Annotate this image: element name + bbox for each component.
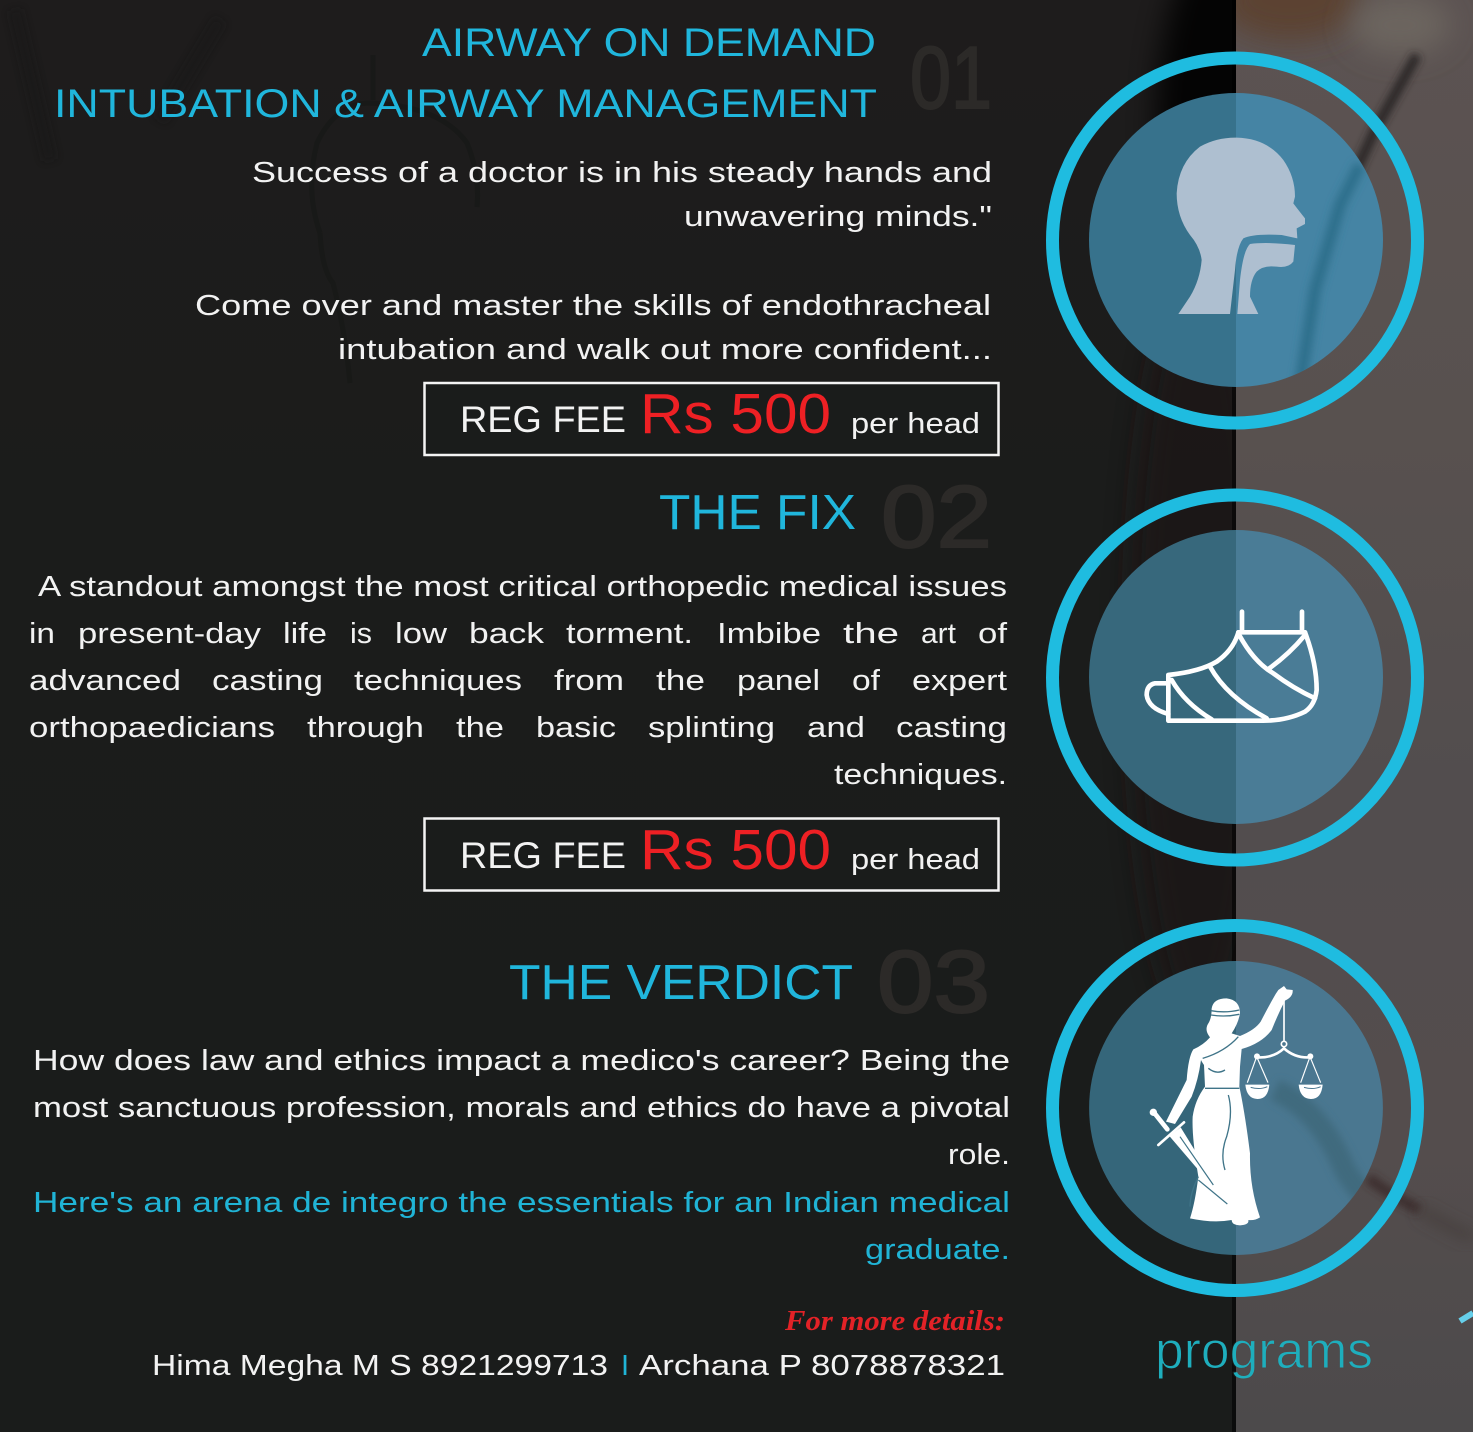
background: dark left panel xyxy=(1150,0,1236,1432)
the fix body text: from xyxy=(554,665,624,697)
the fix body text: expert xyxy=(912,665,1007,697)
the fix body text: advanced xyxy=(29,665,181,697)
the fix body text: the xyxy=(656,665,705,697)
the fix body text: and xyxy=(807,712,865,744)
the fix body text: of xyxy=(852,665,881,697)
intro text block: intubation and walk out more confident... xyxy=(338,334,992,366)
the fix body text: life xyxy=(283,618,327,650)
the fix body text: art xyxy=(921,618,956,650)
the verdict body text xyxy=(33,1045,1010,1266)
the verdict body text: Here's an arena de integro the essentials for an Indian medical xyxy=(33,1187,1010,1219)
contact line xyxy=(152,1350,1005,1382)
the fix body text: Imbibe xyxy=(717,618,821,650)
the fix body text: panel xyxy=(737,665,820,697)
fee box 1 xyxy=(424,382,998,455)
icon circle 3: lady justice xyxy=(1052,926,1418,1290)
title: airway on demand: INTUBATION & AIRWAY MANAGEMENT xyxy=(54,82,877,126)
contact line: Hima Megha M S 8921299713 xyxy=(152,1350,608,1382)
the fix body text: low xyxy=(395,618,448,650)
heading: the fix: THE FIX xyxy=(659,486,856,540)
icon: foot in cast xyxy=(1147,612,1317,721)
title: airway on demand xyxy=(54,21,877,126)
icon circle 1: airway head xyxy=(1052,58,1418,423)
the fix body text: of xyxy=(978,618,1008,650)
intro text block: Come over and master the skills of endothracheal xyxy=(195,290,991,322)
the fix body text: in xyxy=(29,618,55,650)
the fix body text: through xyxy=(307,712,424,744)
number 01: 01 xyxy=(910,28,992,127)
the verdict body text: How does law and ethics impact a medico's career? Being the xyxy=(33,1045,1010,1077)
the fix body text xyxy=(29,571,1008,791)
the verdict body text: role. xyxy=(948,1139,1010,1171)
title: airway on demand: AIRWAY ON DEMAND xyxy=(422,21,876,65)
fee box 2: REG FEE xyxy=(460,835,626,876)
intro text block: Success of a doctor is in his steady hands and xyxy=(252,157,992,189)
heading: the verdict: THE VERDICT xyxy=(509,956,853,1010)
fee box 1: per head xyxy=(851,408,980,440)
for more details: For more details: xyxy=(784,1305,1005,1337)
fee box 2: per head xyxy=(851,844,980,876)
fee box 1: REG FEE xyxy=(460,399,626,440)
the fix body text: orthopaedicians xyxy=(29,712,275,744)
the fix body text: is xyxy=(350,618,372,650)
the verdict body text: most sanctuous profession, morals and ethics do have a pivotal xyxy=(33,1092,1010,1124)
the fix body text: basic xyxy=(536,712,616,744)
the fix body text: present-day xyxy=(78,618,262,650)
fee box 2 xyxy=(424,818,998,890)
icon: lady justice with scales and sword xyxy=(1150,986,1323,1225)
contact line: Archana P 8078878321 xyxy=(639,1350,1005,1382)
the fix body text: splinting xyxy=(648,712,775,744)
fee box 1: Rs 500 xyxy=(640,382,831,446)
the fix body text: A standout amongst the most critical orthopedic medical issues xyxy=(38,571,1007,603)
icon circle 2: leg cast xyxy=(1052,495,1418,860)
fee box 2: Rs 500 xyxy=(640,818,831,882)
number 03: 03 xyxy=(877,932,990,1031)
intro text block xyxy=(195,157,992,366)
the fix body text: the xyxy=(456,712,504,744)
the fix body text: casting xyxy=(896,712,1007,744)
number 02: 02 xyxy=(881,467,992,566)
the fix body text: techniques xyxy=(354,665,522,697)
accent stroke at right edge xyxy=(1460,1313,1473,1321)
intro text block: unwavering minds." xyxy=(684,201,992,233)
background: blurred photo right panel xyxy=(1220,0,1473,1432)
icon: head and airway xyxy=(1177,138,1305,314)
contact line: I xyxy=(621,1350,629,1382)
the fix body text: techniques. xyxy=(834,759,1007,791)
the fix body text: back xyxy=(469,618,545,650)
label: programs: programs xyxy=(1155,1322,1373,1380)
the fix body text: torment. xyxy=(566,618,693,650)
the fix body text: the xyxy=(843,618,899,650)
the verdict body text: graduate. xyxy=(865,1234,1010,1266)
the fix body text: casting xyxy=(212,665,323,697)
